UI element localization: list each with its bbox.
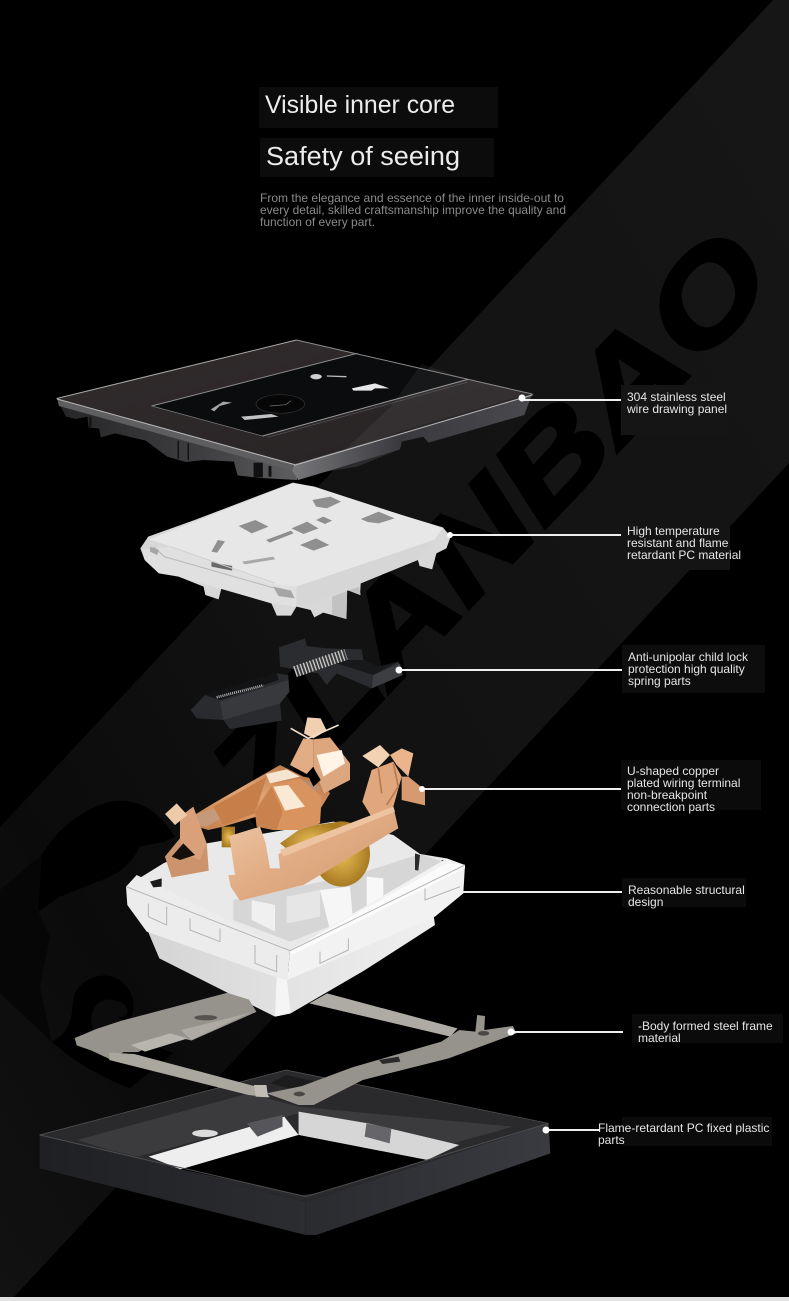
housing rim right: [287, 858, 465, 980]
base center opening: [181, 1135, 427, 1195]
spring: [295, 654, 346, 672]
callout: fixed plastic parts: [542, 1117, 772, 1147]
mid clip: [255, 778, 322, 830]
right clip: [362, 745, 425, 820]
gold terminal core: [222, 821, 370, 887]
callout: steel frame: -Body formed steel frame: [638, 1019, 773, 1033]
long arm terminal: [192, 765, 330, 830]
callout: copper terminal: [419, 760, 761, 814]
copper terminals: [165, 717, 425, 901]
left shutter: [191, 673, 289, 729]
callout: PC material: resistant and flame: [627, 536, 729, 550]
callout: steel frame: material: [638, 1031, 681, 1045]
socket holes: [211, 374, 389, 420]
intro paragraph: From the elegance and essence of the inner inside-out to: [260, 191, 564, 205]
title: Safety of seeing: Safety of seeing: [266, 143, 460, 171]
base plate drawn behind frame: [40, 1070, 550, 1235]
cover socket openings: [211, 497, 395, 571]
top clip: [290, 717, 350, 793]
callout: 304 stainless steel: 304 stainless steel: [627, 390, 726, 404]
callout: PC material: High temperature: [627, 524, 720, 538]
callout: PC material: [447, 523, 741, 570]
base top surface: [40, 1070, 549, 1202]
base inner shaded area: [77, 1093, 513, 1157]
title: Safety of seeing: [260, 138, 494, 177]
intro paragraph: every detail, skilled craftsmanship improve the quality and: [260, 203, 566, 217]
title: Visible inner core: Visible inner core: [265, 91, 455, 119]
callout: 304 stainless steel: wire drawing panel: [626, 402, 727, 416]
part: PC flame retardant white cover: [140, 483, 451, 619]
panel highlight edges: [57, 340, 532, 465]
part: steel mounting frame: [40, 993, 550, 1235]
front strip terminal: [228, 807, 398, 901]
callout: PC material: retardant PC material: [627, 548, 741, 562]
base left wall: [40, 1135, 306, 1235]
cover front left rail: [143, 547, 296, 607]
callout: child lock: [396, 645, 765, 693]
frame back left arm: [75, 993, 256, 1058]
frame back arm pads: [131, 1012, 252, 1052]
callout: fixed plastic parts: Flame-retardant PC fixed plastic: [598, 1121, 769, 1135]
part: child lock and spring: [191, 638, 403, 729]
housing rim left: [126, 875, 290, 980]
brushed steel top face: [57, 340, 532, 464]
panel underside clips right: [296, 400, 529, 477]
frame holes and tabs: [254, 1031, 489, 1097]
frame front right arm: [266, 1015, 516, 1105]
underside clip details: [89, 417, 271, 477]
callout: copper terminal: connection parts: [627, 800, 715, 814]
panel right edge: [292, 394, 532, 480]
glass insert: [152, 353, 468, 436]
callout: copper terminal: plated wiring terminal: [627, 776, 740, 790]
cover rail and corner details: [150, 547, 295, 598]
callout: structural design: [462, 878, 746, 909]
intro paragraph: function of every part.: [260, 215, 375, 229]
callout: structural design: Reasonable structural: [628, 883, 745, 897]
callout: copper terminal: U-shaped copper: [627, 764, 719, 778]
callout: child lock: spring parts: [628, 674, 691, 688]
intro paragraph: [260, 191, 566, 229]
frame front left arm: [109, 1053, 270, 1097]
watermark: brand logo: [0, 801, 175, 1088]
callout: structural design: design: [628, 895, 663, 909]
right shutter: [279, 638, 403, 688]
base right wall: [306, 1123, 550, 1235]
glass reflection: [343, 364, 529, 452]
housing notches: [126, 865, 465, 972]
panel left edge: [57, 398, 295, 471]
title: Visible inner core: [259, 87, 498, 128]
cover front right shade: [296, 540, 434, 607]
callout: steel frame: [508, 1014, 783, 1045]
housing interior: [128, 822, 463, 951]
callout: 304 stainless steel: [518, 385, 729, 435]
watermark: brand wordmark: ZLANBAO: [180, 206, 789, 847]
cover silhouette: [140, 483, 451, 619]
frame back right arm: [309, 993, 457, 1037]
base white opening rim: [149, 1117, 299, 1169]
part: 304 stainless steel panel: [57, 340, 532, 480]
callout: fixed plastic parts: parts: [598, 1133, 625, 1147]
cover top face: [149, 483, 443, 587]
housing lower body: [147, 913, 435, 1017]
callout: child lock: Anti-unipolar child lock: [628, 650, 749, 664]
left small clip: [165, 803, 209, 877]
part: white structural housing: [126, 717, 465, 1017]
callout: child lock: protection high quality: [628, 662, 745, 676]
bottom page strip: [0, 1297, 789, 1301]
callout: copper terminal: non-breakpoint: [627, 788, 708, 802]
panel underside clips left: [59, 403, 297, 480]
